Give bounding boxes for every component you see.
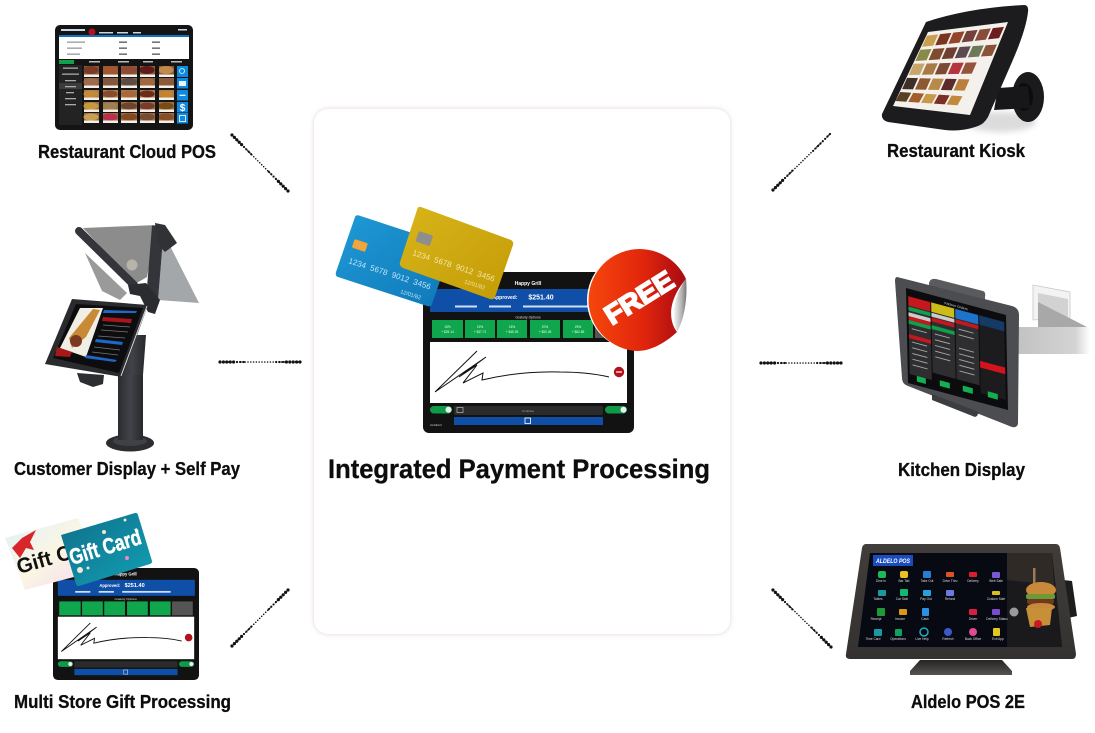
aldelo logo — [873, 555, 913, 566]
free sticker — [587, 249, 687, 351]
credit card: blue: 12/01/82 — [399, 289, 422, 302]
panel background — [314, 109, 730, 634]
app icon labels: Bar Tab — [899, 579, 910, 583]
gift card: teal: Gift Card — [66, 524, 144, 570]
credit card: blue: 1234 5678 9012 3456 — [347, 256, 432, 292]
app icon labels: Receipt — [871, 617, 882, 621]
label: kitchen display: Kitchen Display — [898, 460, 1025, 480]
connector: top right — [773, 134, 830, 190]
payment tablet: $251.40 — [528, 294, 554, 302]
category menu — [59, 65, 82, 125]
label: aldelo pos 2e: Aldelo POS 2E — [911, 692, 1025, 712]
payment tablet: Approved: — [492, 295, 518, 301]
free sticker: FREE — [599, 265, 679, 331]
panel: integrated payment processing — [314, 109, 730, 634]
order list — [59, 28, 189, 64]
app icon labels — [866, 579, 1008, 641]
device: aldelo pos 2e — [846, 544, 1077, 675]
app icons — [874, 571, 1000, 636]
payment tablet: + $50.28 — [539, 330, 551, 334]
payment tablet: Continue — [522, 409, 534, 413]
mount clips — [929, 279, 985, 306]
app icon labels: Tables — [873, 597, 883, 601]
app icon labels: Cash — [921, 617, 929, 621]
payment tablet: 15% — [477, 325, 483, 329]
app icon labels: Web Sale — [989, 579, 1003, 583]
credit card: gold: 12/01/82 — [463, 279, 486, 292]
device: kitchen display — [895, 277, 1090, 427]
burger image — [1007, 553, 1062, 647]
connector: bottom left — [232, 590, 288, 646]
app icon labels: Exit App — [992, 637, 1004, 641]
payment tablet: Gratuity Options — [515, 316, 541, 320]
wall mount — [994, 72, 1044, 122]
app icon labels: Take Out — [921, 579, 933, 583]
gift tablet: Happy Grill — [115, 572, 137, 577]
device: customer display and self pay stand — [45, 223, 199, 452]
credit card: blue — [336, 215, 451, 306]
app icon labels: Refresh — [942, 637, 954, 641]
gift tablet: $251.40 — [125, 583, 145, 589]
monitor screen — [858, 553, 1062, 647]
stand — [910, 660, 1012, 675]
gift tablet: Gratuity Options — [114, 597, 137, 601]
kiosk shadow — [964, 112, 1036, 132]
app icon labels: Invoice — [895, 617, 905, 621]
credit card: gold — [400, 207, 513, 299]
connector: bottom right — [773, 590, 831, 647]
front display — [45, 299, 148, 387]
device: multi store gift processing — [5, 513, 199, 680]
payment tablet: 15% — [444, 325, 451, 329]
app icon labels: Pay Out — [920, 597, 932, 601]
gift tablet — [53, 568, 199, 680]
payment tablet — [423, 272, 634, 433]
kiosk screen — [893, 22, 1008, 115]
kitchen screen: Kitchen Orders — [944, 301, 968, 311]
rear display — [79, 223, 199, 314]
tablet body — [55, 25, 193, 130]
app icon labels: Dine In — [876, 579, 886, 583]
display body — [895, 277, 1019, 427]
connector: middle left — [220, 361, 300, 363]
label: restaurant kiosk: Restaurant Kiosk — [887, 141, 1026, 161]
app icon labels: Delivery Status — [986, 617, 1008, 621]
app icon labels: Refund — [945, 597, 955, 601]
payment tablet: + $62.85 — [572, 330, 584, 334]
app icon labels: Live Help — [915, 637, 929, 641]
app icon labels: Time Card — [866, 637, 881, 641]
app icon labels: Driver — [969, 617, 978, 621]
payment tablet: + $45.25 — [506, 330, 518, 334]
connector: top left — [232, 135, 288, 191]
device: restaurant cloud pos — [55, 25, 193, 130]
app icon labels: Drive Thru — [943, 579, 958, 583]
stand pole and base — [106, 335, 154, 452]
payment tablet: 18% — [509, 325, 515, 329]
payment tablet: 25% — [575, 325, 581, 329]
kitchen screen — [906, 288, 1008, 410]
app icon labels: Back Office — [965, 637, 981, 641]
kiosk body — [882, 5, 1028, 130]
payment tablet: 20% — [542, 325, 548, 329]
card reader — [1063, 580, 1077, 618]
app icon labels: Delivery — [967, 579, 979, 583]
gift card: pale — [5, 518, 105, 590]
food grid — [84, 65, 174, 124]
credit card: gold: 1234 5678 9012 3456 — [411, 248, 496, 284]
device: restaurant kiosk — [882, 5, 1044, 132]
payment tablet: ALDELO — [430, 423, 443, 427]
label: customer display + self pay: Customer Display + Self Pay — [14, 459, 240, 479]
gift tablet: Approved: — [99, 583, 120, 588]
heading: Integrated Payment Processing — [328, 454, 710, 484]
payment tablet: + $37.71 — [474, 330, 486, 334]
label: multi store gift processing: Multi Store Gift Processing — [14, 692, 231, 712]
monitor body — [846, 544, 1076, 659]
gift card: teal — [61, 513, 152, 586]
gift card: pale: Gift Card — [14, 532, 105, 579]
wall bracket — [1018, 285, 1090, 354]
payment tablet: + $25.14 — [441, 330, 454, 334]
app icon labels: Car Side — [896, 597, 908, 601]
label: restaurant cloud pos: Restaurant Cloud POS — [38, 142, 216, 162]
app icon labels: Custom Sale — [987, 597, 1005, 601]
action buttons: $ — [180, 103, 186, 114]
payment tablet: Happy Grill — [515, 281, 542, 287]
connector: middle right — [761, 362, 841, 364]
app icon labels: Operations — [890, 637, 906, 641]
aldelo logo: ALDELO POS — [875, 558, 911, 565]
